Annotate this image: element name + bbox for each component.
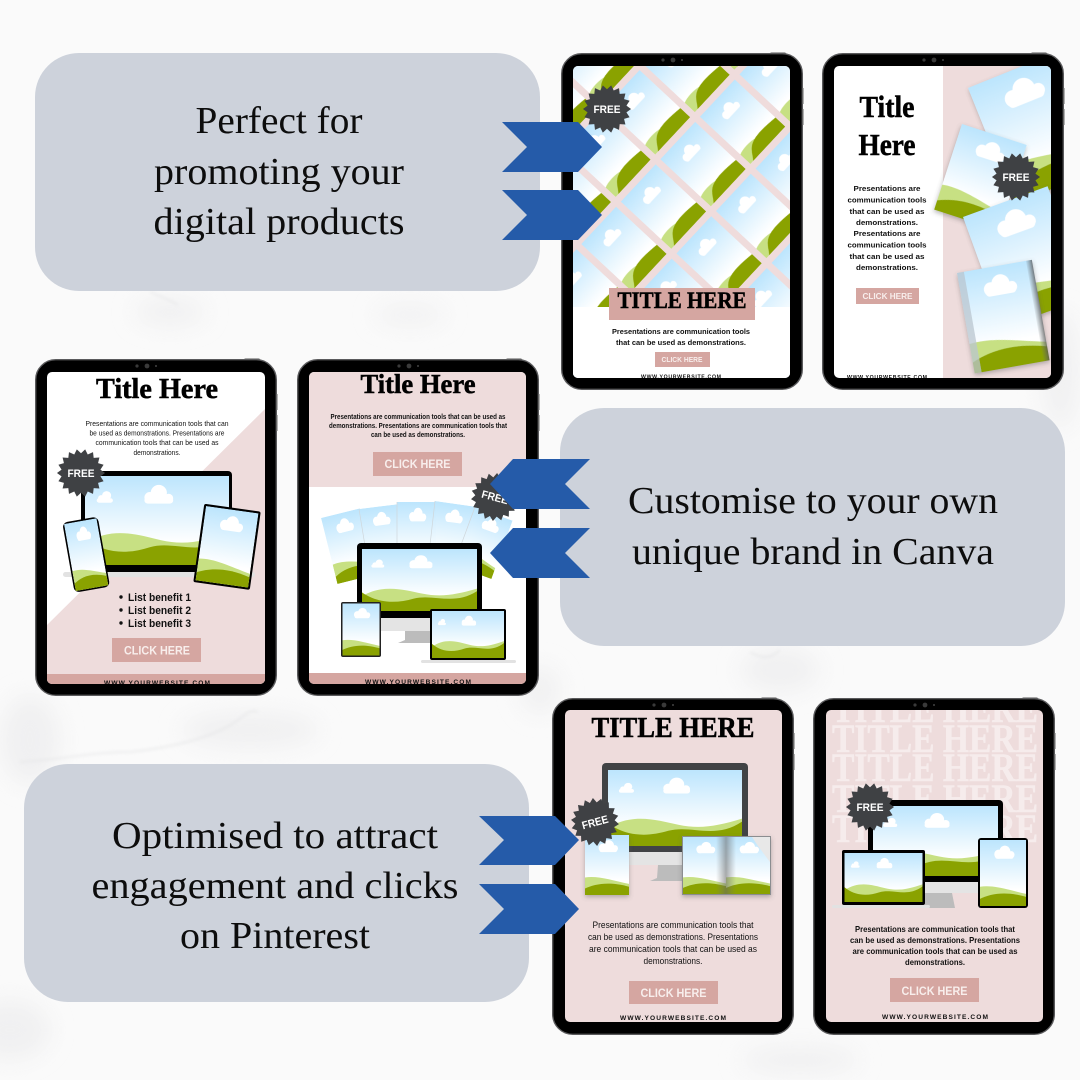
tablet 4: fan of covers with devices: demonstrations. Presentations are communication tools that <box>329 423 508 430</box>
tablet 2: scattered covers layout: WWW.YOURWEBSITE.COM <box>847 375 927 381</box>
tablet 6: repeated title layout with devices: WWW.YOURWEBSITE.COM <box>882 1014 988 1021</box>
panel: optimised for Pinterest: engagement and clicks <box>92 865 458 907</box>
tablet 3: diagonal pink layout with device mockups: List benefit 3 <box>128 618 191 630</box>
tablet 5: pink layout with monitor and book: WWW.YOURWEBSITE.COM <box>620 1015 726 1022</box>
panel: optimised for Pinterest: Optimised to attract <box>112 815 438 857</box>
tablet 2: scattered covers layout: communication tools <box>848 240 926 250</box>
tablet 6: repeated title layout with devices: TITLE HERE <box>832 745 1038 790</box>
tablet 5: pink layout with monitor and book: demonstrations. <box>644 956 702 966</box>
panel: customise in Canva <box>560 408 1065 646</box>
tablet 1: diagonal grid layout: FREE <box>594 104 620 116</box>
tablet 1: diagonal grid layout: CLICK HERE <box>662 355 702 364</box>
tablet 3: diagonal pink layout with device mockups: List benefit 1 <box>128 592 191 604</box>
arrow tags: panel 1 <box>502 122 602 240</box>
tablet 3: diagonal pink layout with device mockups: WWW.YOURWEBSITE.COM <box>104 680 210 687</box>
tablet 3: diagonal pink layout with device mockups: be used as demonstrations. Presentations are <box>90 428 224 438</box>
panel: customise in Canva: Customise to your own <box>628 480 998 522</box>
arrow tags: panel 2 <box>490 459 590 578</box>
tablet 4: fan of covers with devices: can be used as demonstrations. <box>371 432 465 439</box>
tablet 6: repeated title layout with devices: TITLE HERE <box>832 716 1038 761</box>
tablet 1: diagonal grid layout: WWW.YOURWEBSITE.COM <box>641 374 721 380</box>
tablet 4: fan of covers with devices: FREE <box>480 489 509 507</box>
tablet 5: pink layout with monitor and book <box>553 697 794 1034</box>
panel: promoting digital products: promoting your <box>154 151 404 193</box>
panel: promoting digital products <box>35 53 540 291</box>
panel: promoting digital products: digital products <box>154 201 404 243</box>
tablet 4: fan of covers with devices <box>298 358 540 695</box>
panel: promoting digital products: Perfect for <box>196 100 363 142</box>
tablet 4: fan of covers with devices: Title Here <box>360 369 476 399</box>
tablet 2: scattered covers layout: Presentations are <box>854 184 920 193</box>
tablet 2: scattered covers layout <box>823 52 1080 389</box>
panel: customise in Canva: unique brand in Canva <box>632 531 994 573</box>
tablet 6: repeated title layout with devices: FREE <box>856 802 884 814</box>
tablet 5: pink layout with monitor and book: CLICK HERE <box>640 986 706 1000</box>
tablet 3: diagonal pink layout with device mockups: CLICK HERE <box>124 644 190 658</box>
tablet 5: pink layout with monitor and book: Presentations are communication tools that <box>592 920 754 930</box>
tablet 6: repeated title layout with devices: can be used as demonstrations. Presentations <box>850 935 1020 945</box>
tablet 6: repeated title layout with devices: demonstrations. <box>905 957 965 967</box>
tablet 6: repeated title layout with devices <box>814 686 1056 1034</box>
tablet 5: pink layout with monitor and book: are communication tools that can be used as <box>589 944 757 954</box>
tablet 4: fan of covers with devices: Presentations are communication tools that can be used as <box>330 414 506 421</box>
tablet 1: diagonal grid layout: TITLE HERE <box>618 288 746 313</box>
tablet 5: pink layout with monitor and book: FREE <box>581 814 610 832</box>
tablet 6: repeated title layout with devices: Presentations are communication tools that <box>855 924 1015 934</box>
tablet 2: scattered covers layout: communication tools <box>848 196 926 204</box>
tablet 6: repeated title layout with devices: are communication tools that can be used as <box>852 946 1018 956</box>
tablet 2: scattered covers layout: CLICK HERE <box>862 292 913 301</box>
tablet 3: diagonal pink layout with device mockups: Presentations are communication tools that can <box>86 419 228 428</box>
tablet 6: repeated title layout with devices: TITLE HERE <box>832 776 1038 821</box>
tablet 2: scattered covers layout: demonstrations. <box>856 263 918 272</box>
tablet 3: diagonal pink layout with device mockups: demonstrations. <box>134 448 180 457</box>
panel: optimised for Pinterest: on Pinterest <box>180 915 370 957</box>
tablet 5: pink layout with monitor and book: TITLE HERE <box>592 713 754 744</box>
tablet 4: fan of covers with devices: WWW.YOURWEBSITE.COM <box>365 679 472 686</box>
tablet 2: scattered covers layout: Title <box>860 89 914 124</box>
tablet 2: scattered covers layout: Here <box>858 127 916 162</box>
tablet 1: diagonal grid layout: that can be used as demonstrations. <box>616 338 746 347</box>
tablet 6: repeated title layout with devices: TITLE HERE <box>832 686 1038 731</box>
arrow tags: panel 3 <box>479 816 579 934</box>
tablet 3: diagonal pink layout with device mockups: FREE <box>68 468 94 480</box>
tablet 3: diagonal pink layout with device mockups: Title Here <box>96 374 218 405</box>
tablet 3: diagonal pink layout with device mockups <box>36 358 278 695</box>
panel: optimised for Pinterest <box>24 764 529 1002</box>
tablet 1: diagonal grid layout <box>561 52 804 390</box>
tablet 2: scattered covers layout: Presentations are <box>854 229 920 238</box>
tablet 4: fan of covers with devices: CLICK HERE <box>384 457 450 471</box>
tablet 2: scattered covers layout: that can be used as <box>850 252 924 261</box>
tablet 3: diagonal pink layout with device mockups: List benefit 2 <box>128 605 191 617</box>
tablet 1: diagonal grid layout: Presentations are communication tools <box>612 327 750 336</box>
tablet 2: scattered covers layout: FREE <box>1002 172 1030 184</box>
tablet 3: diagonal pink layout with device mockups: communication tools that can be used as <box>96 438 219 447</box>
tablet 5: pink layout with monitor and book: can be used as demonstrations. Presentations <box>588 932 758 942</box>
tablet 6: repeated title layout with devices: CLICK HERE <box>902 984 968 998</box>
tablet 2: scattered covers layout: that can be used as <box>850 207 924 216</box>
tablet 6: repeated title layout with devices: TITLE HERE <box>832 806 1038 851</box>
tablet 2: scattered covers layout: demonstrations. <box>856 218 918 227</box>
